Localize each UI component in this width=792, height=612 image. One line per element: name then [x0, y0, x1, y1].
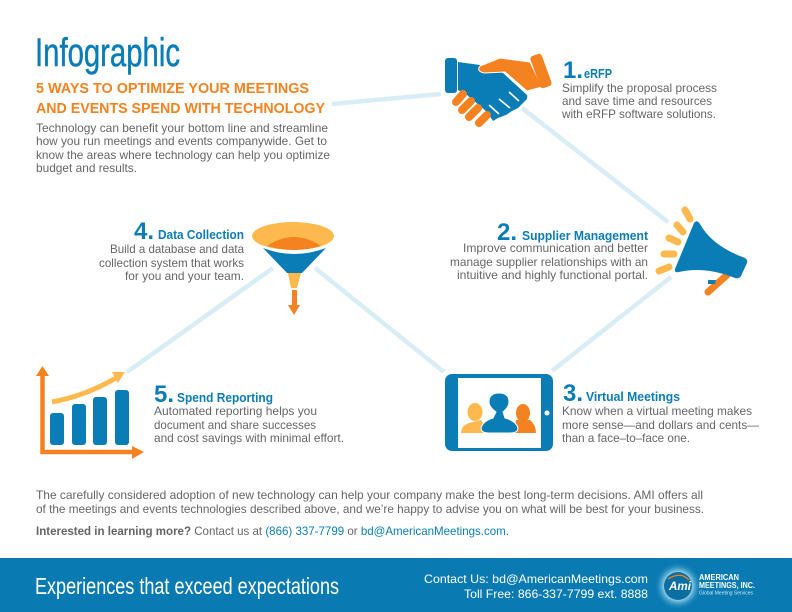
AMI logo: Global Meeting Services	[699, 590, 753, 596]
step 1 text: eRFP: Simplify the proposal process	[562, 81, 717, 95]
step 5 text: Spend Reporting: and cost savings with minimal effort.	[154, 431, 344, 445]
AMI logo: Ami	[668, 579, 692, 593]
icon: megaphone	[659, 210, 747, 292]
step 4 text: Data Collection: 4.	[134, 218, 154, 245]
step 2 text: Supplier Management: intuitive and highly functional portal.	[457, 268, 648, 282]
connector lines	[127, 94, 671, 372]
AMI logo: AMERICAN	[699, 573, 739, 582]
step 5 text: Spend Reporting: document and share successes	[154, 418, 316, 432]
step 4 text: Data Collection: Data Collection	[158, 228, 244, 242]
step 1 text: eRFP: eRFP	[584, 67, 612, 81]
step 5 text: Spend Reporting: Automated reporting helps you	[154, 404, 317, 418]
step 2 text: Supplier Management: Supplier Management	[522, 229, 649, 243]
icon: rising bar chart	[36, 366, 144, 459]
step 4 text: Data Collection: collection system that works	[99, 256, 244, 270]
step 3 text: Virtual Meetings: than a face–to–face one.	[562, 431, 690, 445]
footer banner	[0, 558, 792, 612]
intro text: Technology can benefit your bottom line and streamline	[36, 121, 328, 135]
step 3 text: Virtual Meetings: 3.	[563, 380, 583, 407]
step 1 text: eRFP: and save time and resources	[562, 94, 712, 108]
step 3 text: Virtual Meetings: Know when a virtual meeting makes	[562, 404, 752, 418]
step 1 text: eRFP: with eRFP software solutions.	[561, 107, 716, 121]
intro text	[36, 121, 330, 175]
closing text: of the meetings and events technologies described above, and we’re happy to advise you on what will be best for your business.	[36, 502, 704, 516]
footer contact: Contact Us: bd@AmericanMeetings.com	[424, 572, 648, 586]
title: Infographic	[35, 31, 180, 75]
footer contact	[424, 572, 648, 601]
subtitle	[36, 81, 325, 117]
AMI logo: MEETINGS, INC.	[699, 581, 755, 590]
AMI logo	[654, 562, 755, 610]
closing text: The carefully considered adoption of new technology can help your company make the best long-term decisions. AMI offers all	[36, 488, 703, 502]
step 2 text: Supplier Management: 2.	[497, 219, 517, 246]
icon: funnel	[252, 222, 334, 315]
step 4 text: Data Collection: Build a database and data	[110, 242, 244, 256]
step 2 text: Supplier Management: manage supplier relationships with an	[450, 255, 648, 269]
step 5 text: Spend Reporting: Spend Reporting	[177, 391, 273, 405]
icon: tablet with video participants	[445, 374, 553, 451]
step 3 text: Virtual Meetings	[562, 380, 759, 445]
step 1 text: eRFP	[561, 57, 717, 121]
subtitle: 5 WAYS TO OPTIMIZE YOUR MEETINGS	[36, 81, 309, 97]
step 4 text: Data Collection	[99, 218, 244, 283]
intro text: how you run meetings and events companywide. Get to	[36, 134, 327, 148]
step 5 text: Spend Reporting: 5.	[154, 381, 174, 408]
subtitle: AND EVENTS SPEND WITH TECHNOLOGY	[36, 101, 325, 117]
step 2 text: Supplier Management	[450, 219, 649, 282]
step 1 text: eRFP: 1.	[563, 57, 583, 84]
footer contact: Toll Free: 866-337-7799 ext. 8888	[464, 587, 648, 601]
tagline: Experiences that exceed expectations	[35, 573, 339, 599]
step 2 text: Supplier Management: Improve communication and better	[463, 241, 648, 255]
step 4 text: Data Collection: for you and your team.	[125, 269, 244, 283]
closing text	[36, 488, 704, 516]
contact line: Interested in learning more? Contact us at (866) 337-7799 or bd@AmericanMeetings.com.	[36, 524, 509, 538]
step 5 text: Spend Reporting	[154, 381, 344, 445]
step 3 text: Virtual Meetings: more sense—and dollars and cents—	[562, 418, 759, 432]
intro text: budget and results.	[36, 161, 137, 175]
step 3 text: Virtual Meetings: Virtual Meetings	[586, 390, 680, 404]
intro text: know the areas where technology can help you optimize	[36, 148, 330, 162]
icon: handshake	[445, 53, 552, 123]
